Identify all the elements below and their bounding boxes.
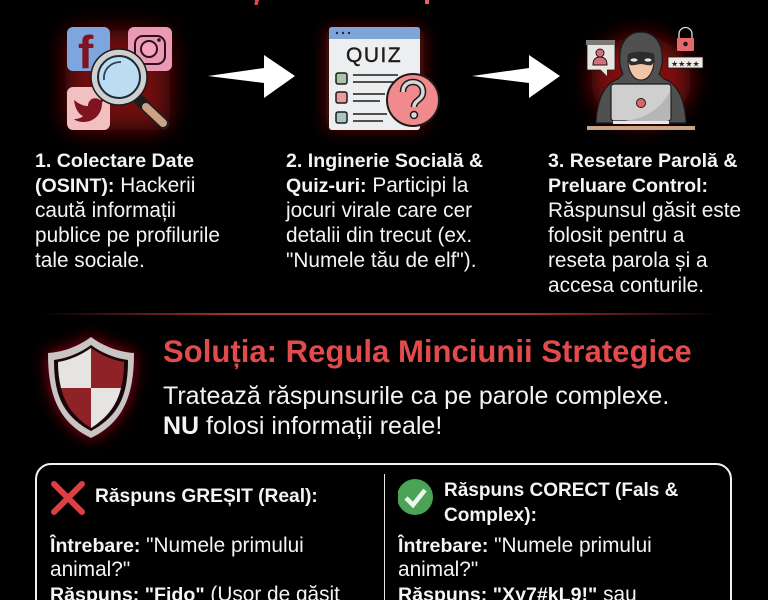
title fragment cut off by top edge: [254, 0, 429, 5]
panel: comparison answers: [35, 463, 732, 600]
solution heading: Soluția: Regula Minciunii Strategice: [163, 334, 692, 369]
wrong answer question: Întrebare: "Numele primului: [50, 534, 304, 557]
icon: hacker at laptop: [586, 28, 703, 130]
wrong answer heading: Răspuns GREȘIT (Real):: [95, 486, 318, 507]
icon: quiz window: [326, 27, 439, 130]
solution text: Tratează răspunsurile ca pe parole complexe.: [163, 382, 669, 410]
step 1 text: caută informații: [35, 199, 176, 222]
icon: red cross: [51, 481, 85, 515]
step 1 text: tale sociale.: [35, 249, 145, 272]
icon: hacker at laptop: ★★★★: [671, 60, 700, 68]
correct answer heading: Răspuns CORECT (Fals &: [444, 480, 678, 501]
correct answer heading: [444, 480, 678, 526]
step 3 text: accesa conturile.: [548, 274, 704, 297]
correct answer question: animal?": [398, 558, 478, 581]
wrong answer question: animal?": [50, 558, 130, 581]
step 2 text: jocuri virale care cer: [286, 199, 472, 222]
step 3 text: Răspunsul găsit este: [548, 199, 741, 222]
step 3 text: 3. Resetare Parolă &: [548, 150, 738, 172]
divider: left and right answers: [384, 474, 385, 600]
step 2 text: Quiz-uri: Participi la: [286, 174, 468, 197]
wrong answer question: [50, 534, 304, 581]
step 1 text: 1. Colectare Date: [35, 150, 194, 172]
solution text: [163, 382, 669, 440]
correct answer question: Întrebare: "Numele primului: [398, 534, 652, 557]
panel: correct answer: [398, 479, 678, 600]
icon: social profiles under magnifier: f: [78, 26, 94, 78]
solution text: NU folosi informații reale!: [163, 412, 442, 440]
step 3 text: [548, 150, 741, 297]
panel: wrong answer: [50, 481, 340, 600]
step 3 text: folosit pentru a: [548, 224, 684, 247]
step 2 text: "Numele tău de elf").: [286, 249, 476, 272]
icon: quiz window: QUIZ: [346, 44, 402, 67]
step 2 text: detalii din trecut (ex.: [286, 224, 472, 247]
step 3 text: Preluare Control:: [548, 175, 708, 197]
panel: correct answer: Complex):: [444, 505, 537, 526]
step 2 text: 2. Inginerie Socială &: [286, 150, 483, 172]
step 1 text: (OSINT): Hackerii: [35, 174, 195, 197]
icon: shield: [36, 328, 146, 448]
step 1 text: [35, 150, 220, 272]
step 3 text: reseta parola și a: [548, 249, 708, 272]
step 2 text: [286, 150, 483, 272]
step 1 text: publice pe profilurile: [35, 224, 220, 247]
arrow: step 2 to step 3: [472, 55, 560, 98]
icon: green check: [398, 479, 433, 515]
arrow: step 1 to step 2: [208, 55, 295, 98]
correct answer question: [398, 534, 652, 581]
